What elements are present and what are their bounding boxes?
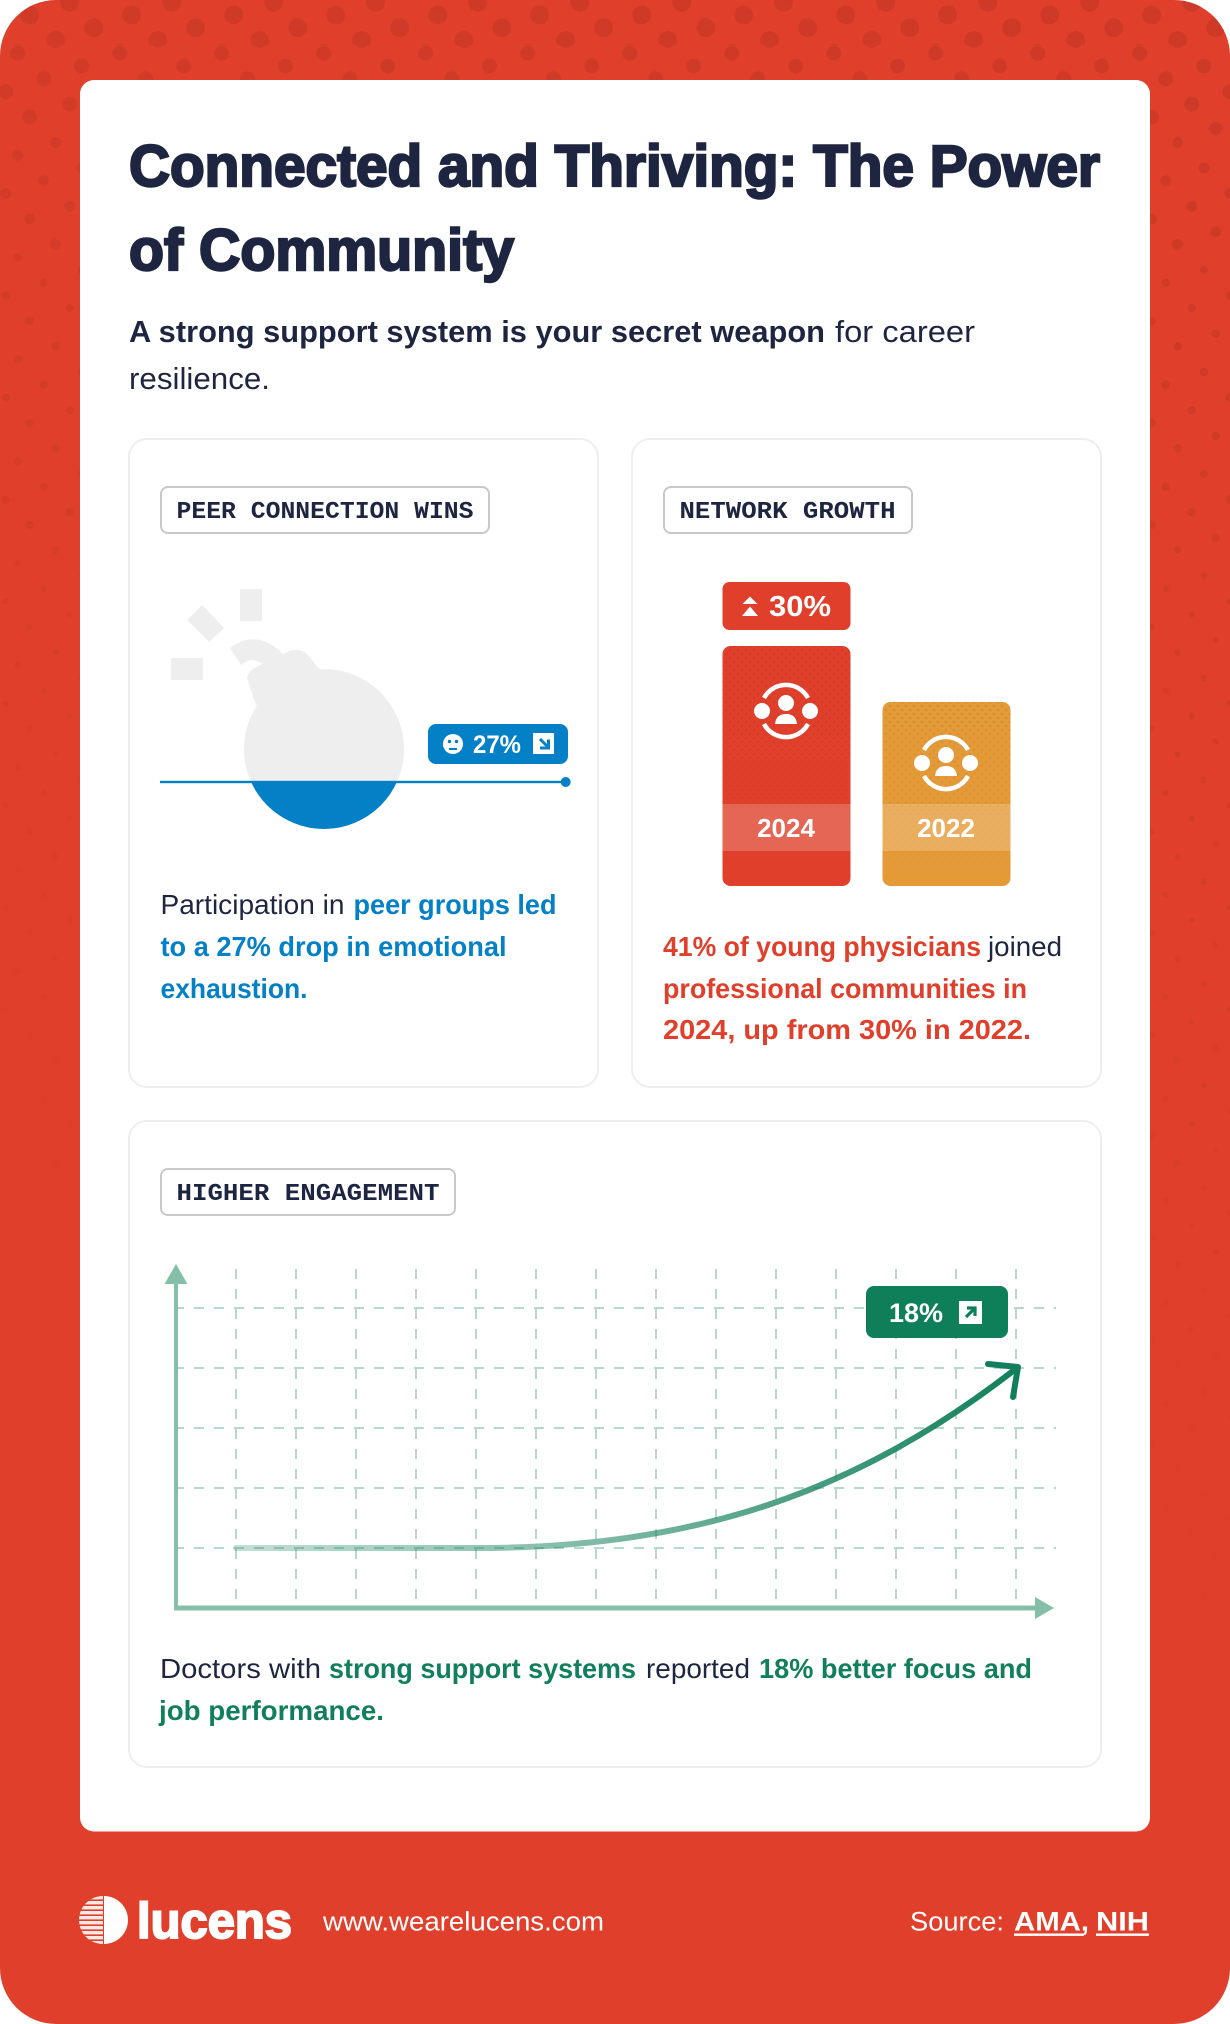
tag: network growth [664, 487, 912, 533]
badge: 18% [866, 1286, 1008, 1338]
badge: 27% [428, 724, 568, 764]
text: peer connection description: Participation in [160, 889, 344, 920]
subtitle: A strong support system is your secret weapon [129, 314, 825, 349]
text: higher engagement description: 18% better focus and [759, 1653, 1032, 1684]
panel: peer connection wins [129, 439, 598, 1087]
tag: higher engagement: HIGHER ENGAGEMENT [176, 1181, 440, 1208]
white content card [80, 80, 1150, 1832]
title [129, 134, 1100, 283]
footer logo [79, 1896, 291, 1944]
chart axes [164, 1264, 1054, 1619]
text: network growth description: joined [987, 931, 1062, 962]
text: peer connection description: to a 27% drop in emotional [160, 931, 506, 962]
tag: peer connection wins: PEER CONNECTION WINS [176, 499, 474, 526]
bar: 2022: 2022 [917, 813, 975, 843]
title: of Community [129, 218, 514, 283]
footer source [910, 1906, 1149, 1936]
icon: community 2022 [914, 737, 978, 789]
footer logo: lucens [137, 1893, 292, 1949]
bar: 2022 [882, 702, 1010, 886]
text: higher engagement description: job performance. [158, 1695, 384, 1726]
text: higher engagement description: reported [646, 1653, 750, 1684]
line chart [164, 1264, 1056, 1619]
footer source: Source: [910, 1906, 1004, 1936]
badge: 27%: 27% [473, 731, 521, 759]
text: peer connection description: peer groups led [354, 889, 556, 920]
subtitle [129, 314, 975, 396]
footer website: www.wearelucens.com [322, 1906, 604, 1936]
bar: 2024 [722, 646, 850, 886]
tag: network growth: NETWORK GROWTH [680, 499, 896, 526]
title: Connected and Thriving: The Power [129, 134, 1100, 199]
icon: community 2024 [754, 685, 818, 737]
subtitle: resilience. [129, 361, 270, 396]
text: network growth description: 2024, up from 30% in 2022. [663, 1014, 1031, 1045]
text: higher engagement description [158, 1653, 1032, 1726]
text: peer connection description [160, 889, 556, 1004]
growth curve arrow [236, 1364, 1018, 1548]
bar: 2024: 2024 [757, 813, 815, 843]
icon: bomb chart [160, 589, 571, 842]
text: higher engagement description: strong support systems [329, 1653, 636, 1684]
footer source: NIH [1096, 1906, 1149, 1936]
subtitle: for career [835, 314, 975, 349]
panel: higher engagement [129, 1121, 1101, 1767]
footer source: AMA, [1014, 1906, 1089, 1936]
badge: 30%: 30% [769, 591, 831, 623]
text: network growth description: professional communities in [663, 973, 1027, 1004]
tag: higher engagement [161, 1169, 455, 1215]
tag: peer connection wins [161, 487, 489, 533]
badge: 18%: 18% [889, 1298, 943, 1328]
text: peer connection description: exhaustion. [160, 973, 308, 1004]
text: network growth description: 41% of young physicians [663, 931, 981, 962]
text: network growth description [663, 931, 1062, 1045]
badge: 30% [722, 582, 850, 630]
text: higher engagement description: Doctors with [160, 1653, 321, 1684]
panel: network growth [632, 439, 1101, 1087]
